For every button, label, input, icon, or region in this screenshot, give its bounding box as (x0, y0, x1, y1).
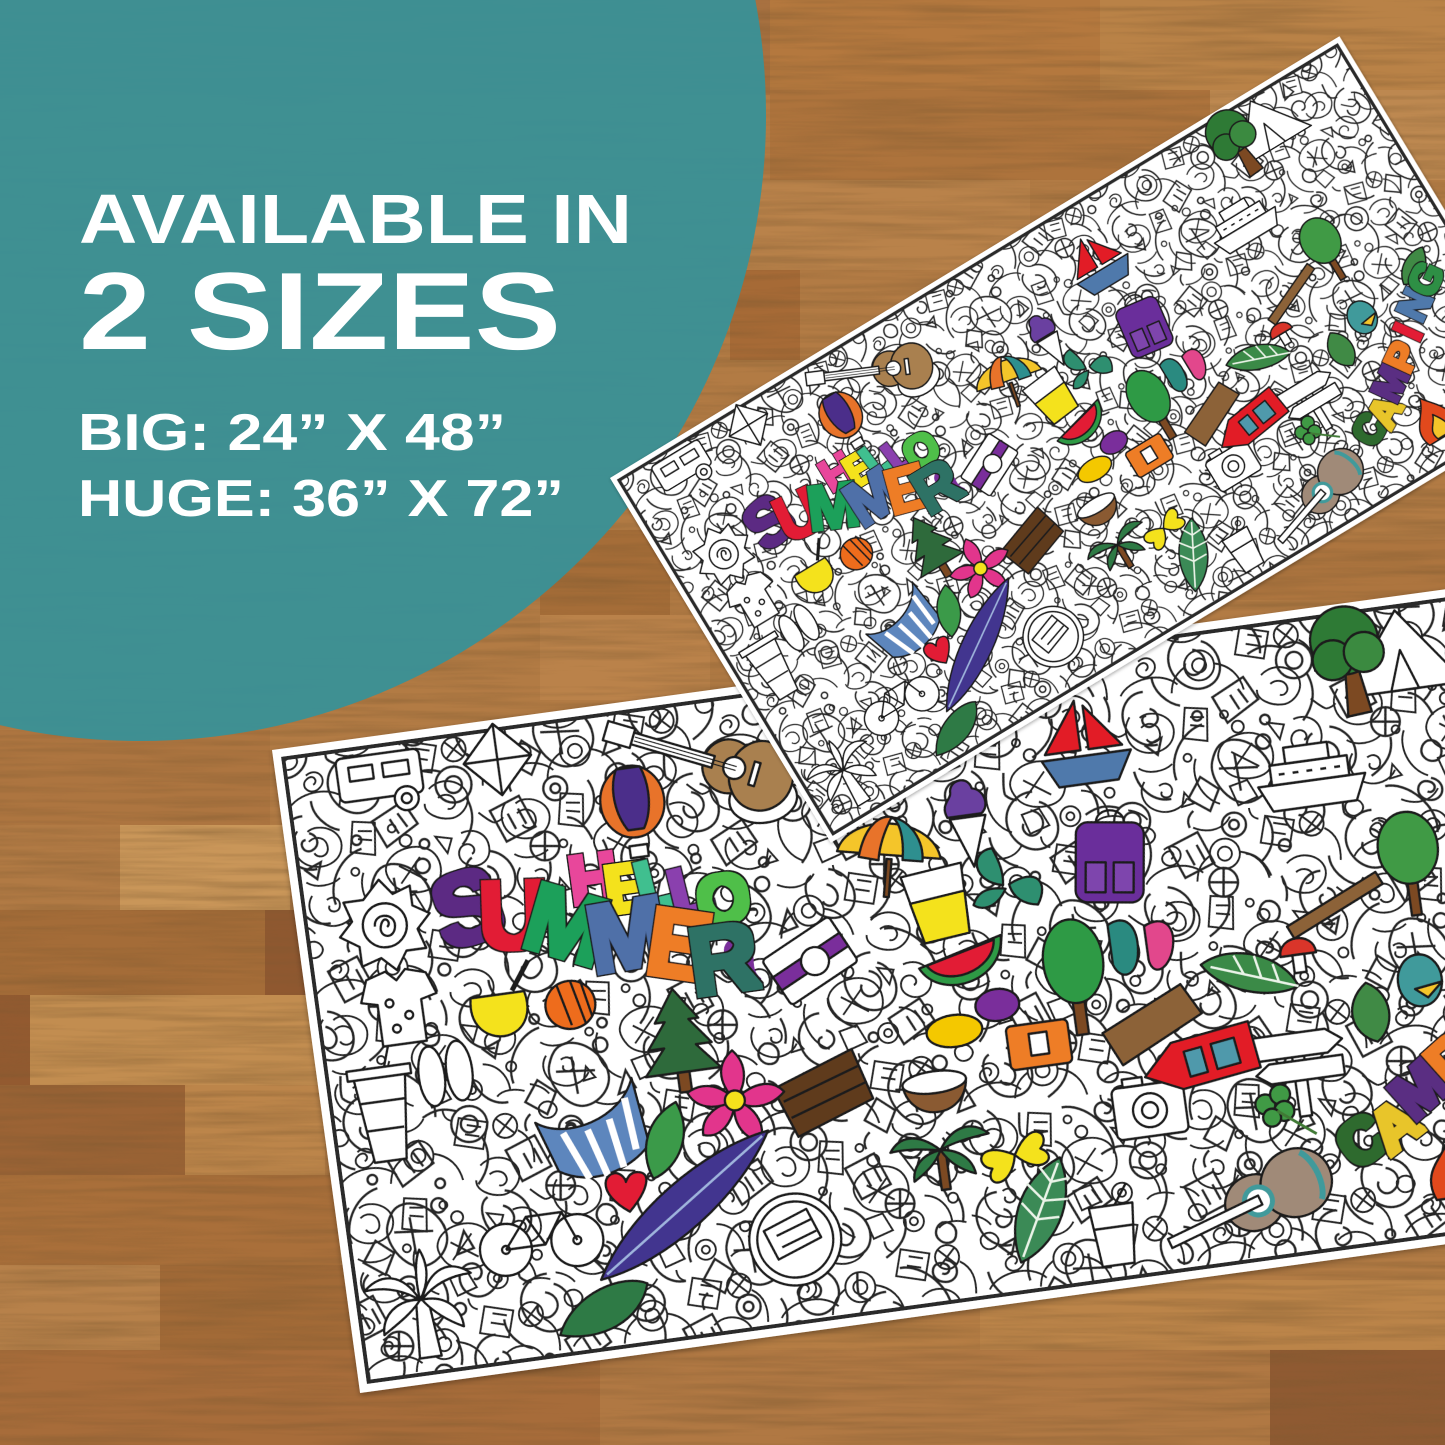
lettering: hello summer camping: H (564, 838, 623, 920)
lettering small: A (1358, 388, 1412, 436)
lettering: hello summer camping: M (579, 875, 676, 994)
lettering small: E (835, 440, 886, 498)
poster: huge 36 x 72 (271, 568, 1445, 1393)
lettering small: I (1385, 317, 1431, 347)
lettering small: O (894, 421, 949, 481)
lettering small: M (832, 453, 914, 541)
lettering: hello summer camping: O (692, 858, 755, 940)
lettering small: E (877, 450, 936, 529)
lettering: hello summer camping: C (1324, 1100, 1401, 1182)
huge size: HUGE: 36” X 72” (78, 470, 564, 528)
heading line 2: 2 SIZES (79, 250, 561, 373)
lettering small: N (1388, 282, 1442, 328)
lettering small: P (1375, 335, 1428, 379)
big size: BIG: 24” X 48” (78, 404, 506, 462)
lettering: hello summer camping: M (513, 862, 620, 987)
lettering: hello summer camping: L (628, 842, 686, 926)
lettering small: C (1342, 405, 1396, 453)
lettering small: U (763, 474, 834, 556)
lettering: hello summer camping: E (599, 847, 655, 929)
colored doodles (289, 576, 1445, 1385)
heading and sizes (78, 180, 632, 528)
lettering: hello summer camping: U (477, 861, 550, 970)
lettering small: L (852, 431, 903, 487)
lettering small (724, 118, 1445, 758)
lettering small: M (1362, 358, 1418, 408)
lettering small: S (728, 480, 809, 564)
lettering small: R (899, 445, 975, 528)
lettering small: M (803, 469, 864, 545)
lettering: hello summer camping: R (682, 901, 765, 1017)
lettering: hello summer camping: L (661, 850, 719, 933)
poster: big 24 x 48 (608, 33, 1445, 843)
colored doodles small (618, 53, 1445, 833)
lettering: hello summer camping: A (1356, 1086, 1434, 1168)
lettering small: L (874, 427, 925, 482)
heading line 1: AVAILABLE IN (79, 180, 632, 258)
lettering small: H (811, 443, 864, 501)
lettering: hello summer camping: S (419, 844, 516, 971)
lettering: hello summer camping: E (640, 887, 719, 1002)
teal circle panel (0, 0, 766, 741)
lettering: hello summer camping (417, 700, 1445, 1304)
